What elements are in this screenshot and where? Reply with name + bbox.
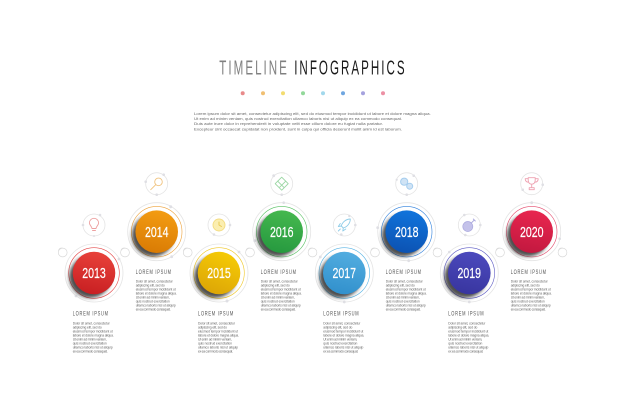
text block 2014: ex ea commodo consequat. [136,308,171,312]
icon: trophy [521,173,544,195]
text block 2014: LOREM IPSUM [136,269,172,276]
text block 2014: labore et dolore magna aliqua. [136,292,177,296]
text block 2018: eiusmod tempor incididunt ut [386,288,426,292]
step 2013 [65,214,123,302]
text block 2018: Ut enim ad minim veniam, [386,296,420,300]
year badge: 2016 [270,225,293,241]
text block 2020: quis nostrud exercitation [511,300,545,304]
text block 2019: adipiscing elit, sed do [448,325,477,329]
text block 2019 [448,310,489,353]
text block 2013: adipiscing elit, sed do [73,325,102,329]
text block 2019: quis nostrud exercitation [448,341,482,345]
text block 2017: ex ea commodo consequat. [323,349,358,353]
year badge: 2013 [82,266,106,282]
step 2014 [128,173,186,261]
text block 2018: Dolor sit amet, consectetur [386,280,424,284]
text block 2013: ex ea commodo consequat. [73,349,108,353]
text block 2017: adipiscing elit, sed do [323,325,352,329]
icon: map [271,173,293,196]
text block 2015: eiusmod tempor incididunt ut [198,329,238,333]
text block 2013: LOREM IPSUM [73,310,109,318]
text block 2018: ex ea commodo consequat. [386,308,421,312]
icon: gears [396,173,418,196]
text block 2020: ex ea commodo consequat. [511,308,546,312]
text block 2018: ullamco laboris nisi ut aliquip [386,304,426,308]
text block 2016 [261,269,302,312]
text block 2019: ex ea commodo consequat. [448,349,483,353]
step 2016 [253,173,311,261]
intro paragraph: Duis aute irure dolor in reprehenderit in voluptate velit esse cillum dolore eu fugiat nulla pariatur. [194,121,383,126]
text block 2020: labore et dolore magna aliqua. [511,292,552,296]
text block 2015: quis nostrud exercitation [198,341,232,345]
text block 2020: LOREM IPSUM [511,269,547,276]
text block 2015: Dolor sit amet, consectetur [198,321,236,325]
text block 2019: eiusmod tempor incididunt ut [448,329,488,333]
title: TIMELINE INFOGRAPHICS [219,58,407,80]
text block 2017: LOREM IPSUM [323,310,359,318]
text block 2017: ullamco laboris nisi ut aliquip [323,345,363,349]
text block 2020: eiusmod tempor incididunt ut [511,288,551,292]
text block 2020: ullamco laboris nisi ut aliquip [511,304,551,308]
color dots row [241,91,385,95]
intro paragraph: Lorem ipsum dolor sit amet, consectetur adipiscing elit, sed do eiusmod tempor incididunt ut labore et dolore magna aliqua. [194,111,431,116]
text block 2018: adipiscing elit, sed do [386,284,415,288]
text block 2017: quis nostrud exercitation [323,341,357,345]
intro paragraph [194,111,431,132]
text block 2016: ullamco laboris nisi ut aliquip [261,304,301,308]
text block 2016: Dolor sit amet, consectetur [261,280,299,284]
text block 2014: eiusmod tempor incididunt ut [136,288,176,292]
icon: light bulb [82,214,105,237]
text block 2016: adipiscing elit, sed do [261,284,290,288]
text block 2015: labore et dolore magna aliqua. [198,333,239,337]
text block 2018 [386,269,427,312]
text block 2013: Ut enim ad minim veniam, [73,337,107,341]
text block 2019: Ut enim ad minim veniam, [448,337,482,341]
year badge: 2019 [458,266,481,282]
text block 2015: adipiscing elit, sed do [198,325,227,329]
intro paragraph: Ut enim ad minim veniam, quis nostrud exercitation ullamco laboris nisi ut aliquip ex ea commodo consequat. [194,116,402,121]
text block 2013: quis nostrud exercitation [73,341,107,345]
step 2017 [315,214,373,303]
text block 2019: Dolor sit amet, consectetur [448,321,486,325]
text block 2016: Ut enim ad minim veniam, [261,296,295,300]
text block 2017: Ut enim ad minim veniam, [323,337,357,341]
text block 2015: ex ea commodo consequat. [198,349,233,353]
text block 2015 [198,310,239,353]
step 2018 [376,173,436,262]
text block 2014: quis nostrud exercitation [136,300,170,304]
text block 2018: quis nostrud exercitation [386,300,420,304]
icon: magnifier [144,173,168,196]
text block 2015: LOREM IPSUM [198,310,234,318]
text block 2017: labore et dolore magna aliqua. [323,333,364,337]
text block 2016: LOREM IPSUM [261,269,297,276]
intro paragraph: Excepteur sint occaecat cupidatat non proident, sunt in culpa qui officia deserunt mollit anim id est laborum. [194,126,402,132]
text block 2020: Ut enim ad minim veniam, [511,296,545,300]
icon: bomb [458,214,482,236]
text block 2016: labore et dolore magna aliqua. [261,292,302,296]
text block 2018: LOREM IPSUM [386,269,422,276]
text block 2013: Dolor sit amet, consectetur [73,321,111,325]
icon: rocket [333,214,357,236]
text block 2018: labore et dolore magna aliqua. [386,292,427,296]
text block 2020: adipiscing elit, sed do [511,284,540,288]
text block 2019: LOREM IPSUM [448,310,484,318]
text block 2019: ullamco laboris nisi ut aliquip [448,345,488,349]
year badge: 2018 [395,225,418,241]
text block 2019: labore et dolore magna aliqua. [448,333,489,337]
text block 2014: Dolor sit amet, consectetur [136,280,174,284]
text block 2020: Dolor sit amet, consectetur [511,280,549,284]
text block 2015: Ut enim ad minim veniam, [198,337,232,341]
year badge: 2017 [333,266,356,282]
year badge: 2014 [145,225,168,241]
year badge: 2015 [207,266,231,282]
text block 2017: eiusmod tempor incididunt ut [323,329,363,333]
connector rings [58,248,567,257]
text block 2017: Dolor sit amet, consectetur [323,321,361,325]
text block 2014 [136,269,177,312]
text block 2015: ullamco laboris nisi ut aliquip [198,345,238,349]
text block 2014: adipiscing elit, sed do [136,284,165,288]
step 2019 [440,214,498,303]
text block 2014: ullamco laboris nisi ut aliquip [136,304,176,308]
text block 2013: eiusmod tempor incididunt ut [73,329,113,333]
text block 2014: Ut enim ad minim veniam, [136,296,170,300]
text block 2016: quis nostrud exercitation [261,300,295,304]
text block 2016: ex ea commodo consequat. [261,308,296,312]
step 2020 [503,173,561,261]
icon: clock [208,214,231,236]
text block 2016: eiusmod tempor incididunt ut [261,288,301,292]
text block 2013: labore et dolore magna aliqua. [73,333,114,337]
step 2015 [190,214,248,302]
text block 2017 [323,310,364,353]
year badge: 2020 [520,225,543,241]
text block 2013 [73,310,114,353]
text block 2020 [511,269,552,312]
text block 2013: ullamco laboris nisi ut aliquip [73,345,113,349]
